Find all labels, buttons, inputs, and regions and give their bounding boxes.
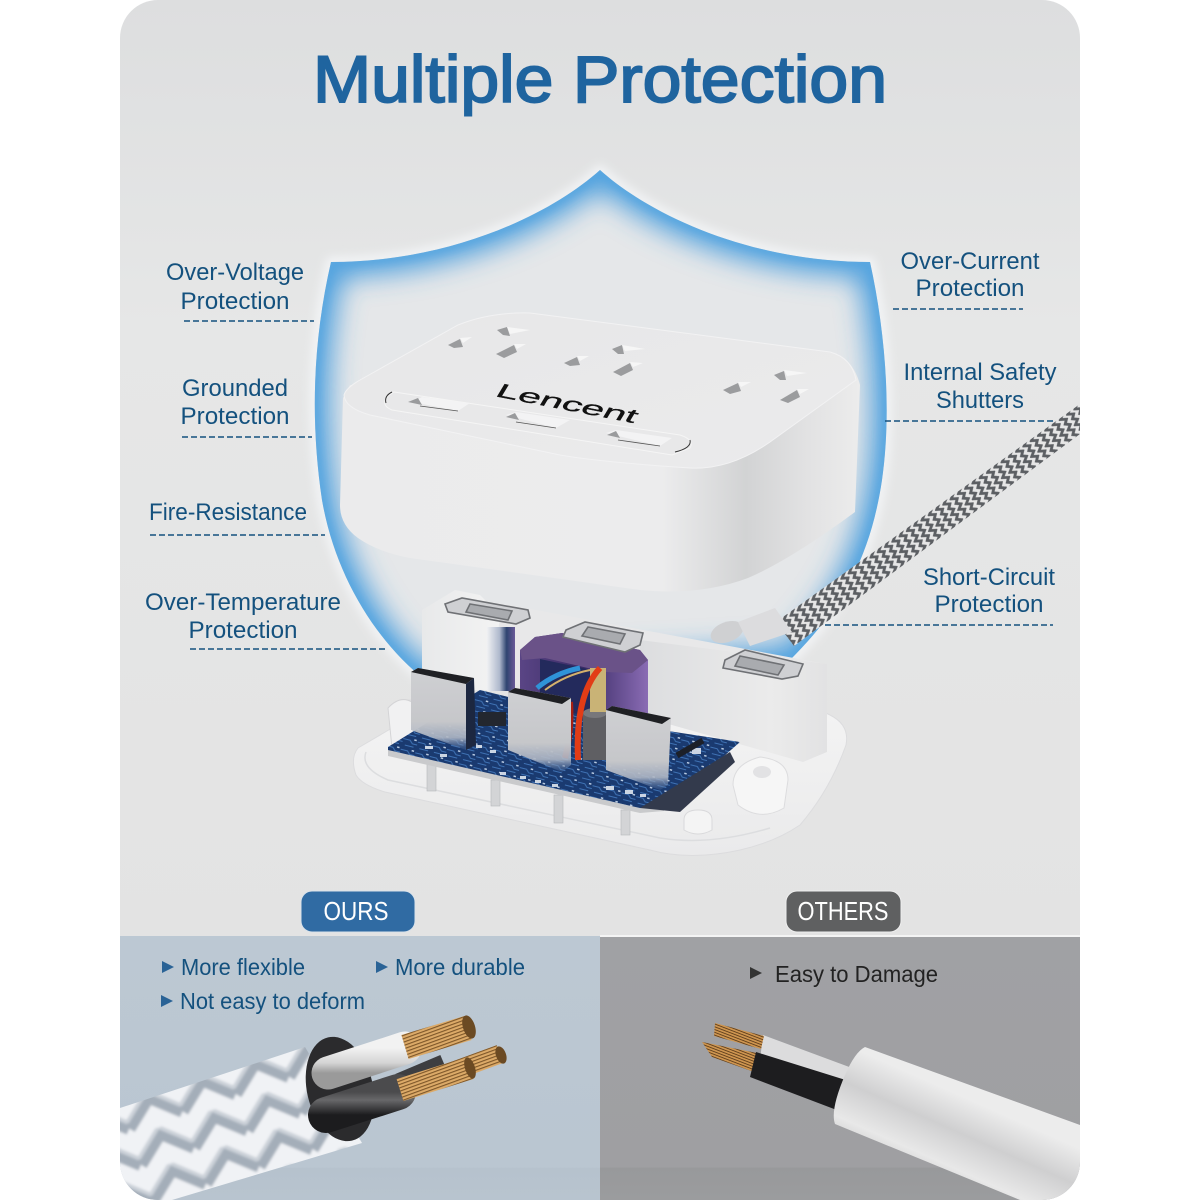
- feature bullets: ours: More flexible: [181, 954, 305, 980]
- lower assembly: tray, circuit board and parts: [353, 590, 847, 856]
- housing back wall: [515, 630, 792, 676]
- panel: ours: [100, 936, 600, 1200]
- label: over-temperature protection: Protection: [188, 617, 298, 644]
- black wire: [326, 1092, 398, 1115]
- title: Multiple Protection: [313, 42, 887, 116]
- support pins: [427, 764, 630, 835]
- label: internal safety shutters: Shutters: [936, 387, 1024, 414]
- right housing box: [640, 640, 827, 762]
- power strip housing: [340, 313, 860, 592]
- housing top face: [344, 313, 856, 468]
- shield glow: [315, 170, 887, 680]
- purple transformer: [520, 633, 648, 716]
- label: over-current protection: [893, 248, 1040, 309]
- housing side: [340, 355, 860, 592]
- label: over-temperature protection: Over-Temperature: [145, 589, 341, 616]
- feature bullet: others: [750, 966, 937, 987]
- badge: ours: OURS: [324, 896, 388, 926]
- socket contact clips: [445, 598, 803, 679]
- outlet slots: [448, 327, 809, 403]
- cable: braided power cord: [776, 404, 1080, 646]
- wires and capacitor: [537, 668, 607, 760]
- label: short-circuit protection: [825, 564, 1055, 625]
- upper panel background: [120, 0, 1080, 936]
- circuit board: [388, 690, 740, 813]
- white wire: [328, 1048, 405, 1073]
- base tray: [353, 700, 847, 856]
- panel boundary highlights: [600, 935, 1080, 937]
- badge: ours: [301, 891, 415, 932]
- panel: others: [600, 936, 1080, 1200]
- left housing tower: [422, 590, 515, 691]
- label: internal safety shutters: [885, 359, 1056, 421]
- label: short-circuit protection: Short-Circuit: [923, 564, 1055, 591]
- plain cable illustration: [702, 1023, 1080, 1200]
- braided cable illustration: [100, 1014, 509, 1200]
- feature bullets: ours: More durable: [395, 954, 525, 980]
- feature bullets: ours: [161, 954, 525, 1014]
- label: over-current protection: Protection: [916, 275, 1024, 302]
- USB port metal shells: [411, 668, 671, 790]
- label: grounded protection: [180, 375, 312, 437]
- label: grounded protection: Protection: [180, 403, 290, 430]
- label: short-circuit protection: Protection: [934, 591, 1044, 618]
- third wire behind: [400, 1066, 445, 1085]
- label: over-current protection: Over-Current: [900, 248, 1040, 275]
- label: grounded protection: Grounded: [182, 375, 288, 402]
- label: over-voltage protection: Over-Voltage: [166, 259, 304, 286]
- label: over-voltage protection: [166, 259, 314, 321]
- USB port panel: [385, 392, 691, 455]
- label: over-temperature protection: [145, 589, 385, 649]
- cable strain relief: [708, 608, 792, 647]
- feature bullets: ours: Not easy to deform: [180, 988, 365, 1014]
- badge: others: OTHERS: [798, 896, 888, 926]
- brand logo: Lencent: [491, 380, 643, 428]
- label: fire-resistance: Fire-Resistance: [149, 499, 307, 526]
- label: internal safety shutters: Internal Safety: [904, 359, 1056, 386]
- feature bullet: others: Easy to Damage: [775, 961, 938, 987]
- tray screw posts: [388, 700, 788, 834]
- badge: others: [786, 891, 901, 932]
- label: over-voltage protection: Protection: [180, 288, 290, 315]
